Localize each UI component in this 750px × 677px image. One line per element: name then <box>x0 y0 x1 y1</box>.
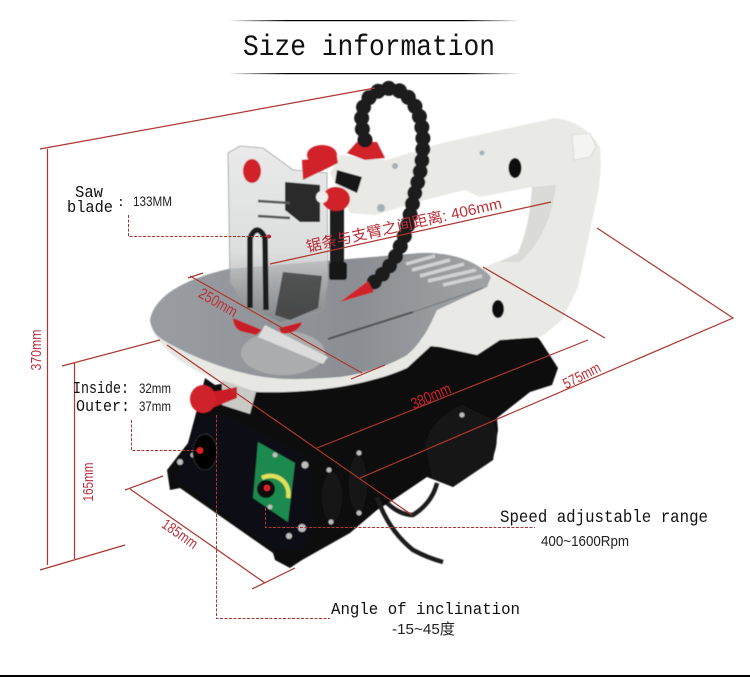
flexible hose <box>362 88 423 283</box>
dimension: table width 250mm <box>188 273 385 379</box>
clamp plates <box>258 201 290 218</box>
product photo: scroll saw <box>150 88 601 568</box>
clamp on arm <box>572 133 596 160</box>
callout: angle of inclination <box>216 415 520 638</box>
base side sockets <box>322 456 367 522</box>
dimension: base width 185mm <box>125 476 295 589</box>
red tilt knob <box>190 380 256 414</box>
callout: saw blade: blade <box>67 199 113 218</box>
saw base <box>167 332 558 568</box>
head window <box>335 170 362 193</box>
arm <box>330 118 601 355</box>
base front face <box>175 413 312 552</box>
switch hole <box>193 434 217 470</box>
callout: saw blade: : <box>117 195 125 210</box>
table slot <box>328 312 413 339</box>
red head assembly <box>302 142 385 211</box>
callout: speed range: Speed adjustable range <box>500 508 708 528</box>
dimension: table length 380mm <box>317 267 605 448</box>
callout: hole diameters: 32mm <box>139 380 171 396</box>
control panel <box>253 442 295 522</box>
white knob collar <box>316 191 328 203</box>
title with rules: Size information <box>243 31 495 65</box>
hose nozzle <box>340 281 374 302</box>
dimension: base width 185mm: 185mm <box>158 516 201 553</box>
callout: angle of inclination: Angle of inclination <box>331 601 520 620</box>
dimension: table width 250mm: 250mm <box>195 285 240 321</box>
dimension: base height 165mm <box>62 340 160 559</box>
callout: hole diameters <box>73 380 204 454</box>
dimension: base height 165mm: 165mm <box>80 462 97 502</box>
power cord <box>377 483 443 562</box>
red blade wedge <box>233 318 302 335</box>
transparent guard <box>228 146 328 323</box>
callout: hole diameters: 37mm <box>139 398 171 414</box>
guard column <box>330 205 344 280</box>
dimension: throat depth 406mm <box>270 195 551 264</box>
motor housing <box>425 405 497 487</box>
guard red knob <box>243 159 261 183</box>
callout: hole diameters: Outer: <box>76 398 130 417</box>
bottom bar <box>0 675 750 677</box>
table top <box>150 253 491 379</box>
base screws <box>177 412 464 539</box>
dimension: overall height 370mm: 370mm <box>28 330 45 370</box>
callout: angle of inclination: -15~45度 <box>392 621 455 638</box>
callout: saw blade: 133MM <box>133 193 172 209</box>
protractor <box>241 331 325 375</box>
table vent stripes <box>406 256 482 285</box>
mitre fence <box>258 325 328 364</box>
callout: saw blade <box>67 184 271 238</box>
arm screws <box>377 150 484 212</box>
blade clamp <box>285 182 320 222</box>
callout: speed range <box>264 484 708 550</box>
dimension: overall length 575mm: 575mm <box>560 359 604 393</box>
black U slot <box>250 230 266 310</box>
table rim <box>150 300 432 392</box>
callout: saw blade: Saw <box>75 184 104 203</box>
callout: hole diameters: Inside: <box>73 380 129 399</box>
column collar <box>329 262 347 280</box>
dimension: table length 380mm: 380mm <box>409 381 454 413</box>
callout: speed range: 400~1600Rpm <box>541 533 629 550</box>
inner arm shade <box>500 185 556 262</box>
lower guard foot <box>275 272 322 320</box>
dimension: throat depth 406mm: 锯条与支臂之间距离: 406mm <box>305 195 503 256</box>
arm rivets <box>492 158 522 318</box>
